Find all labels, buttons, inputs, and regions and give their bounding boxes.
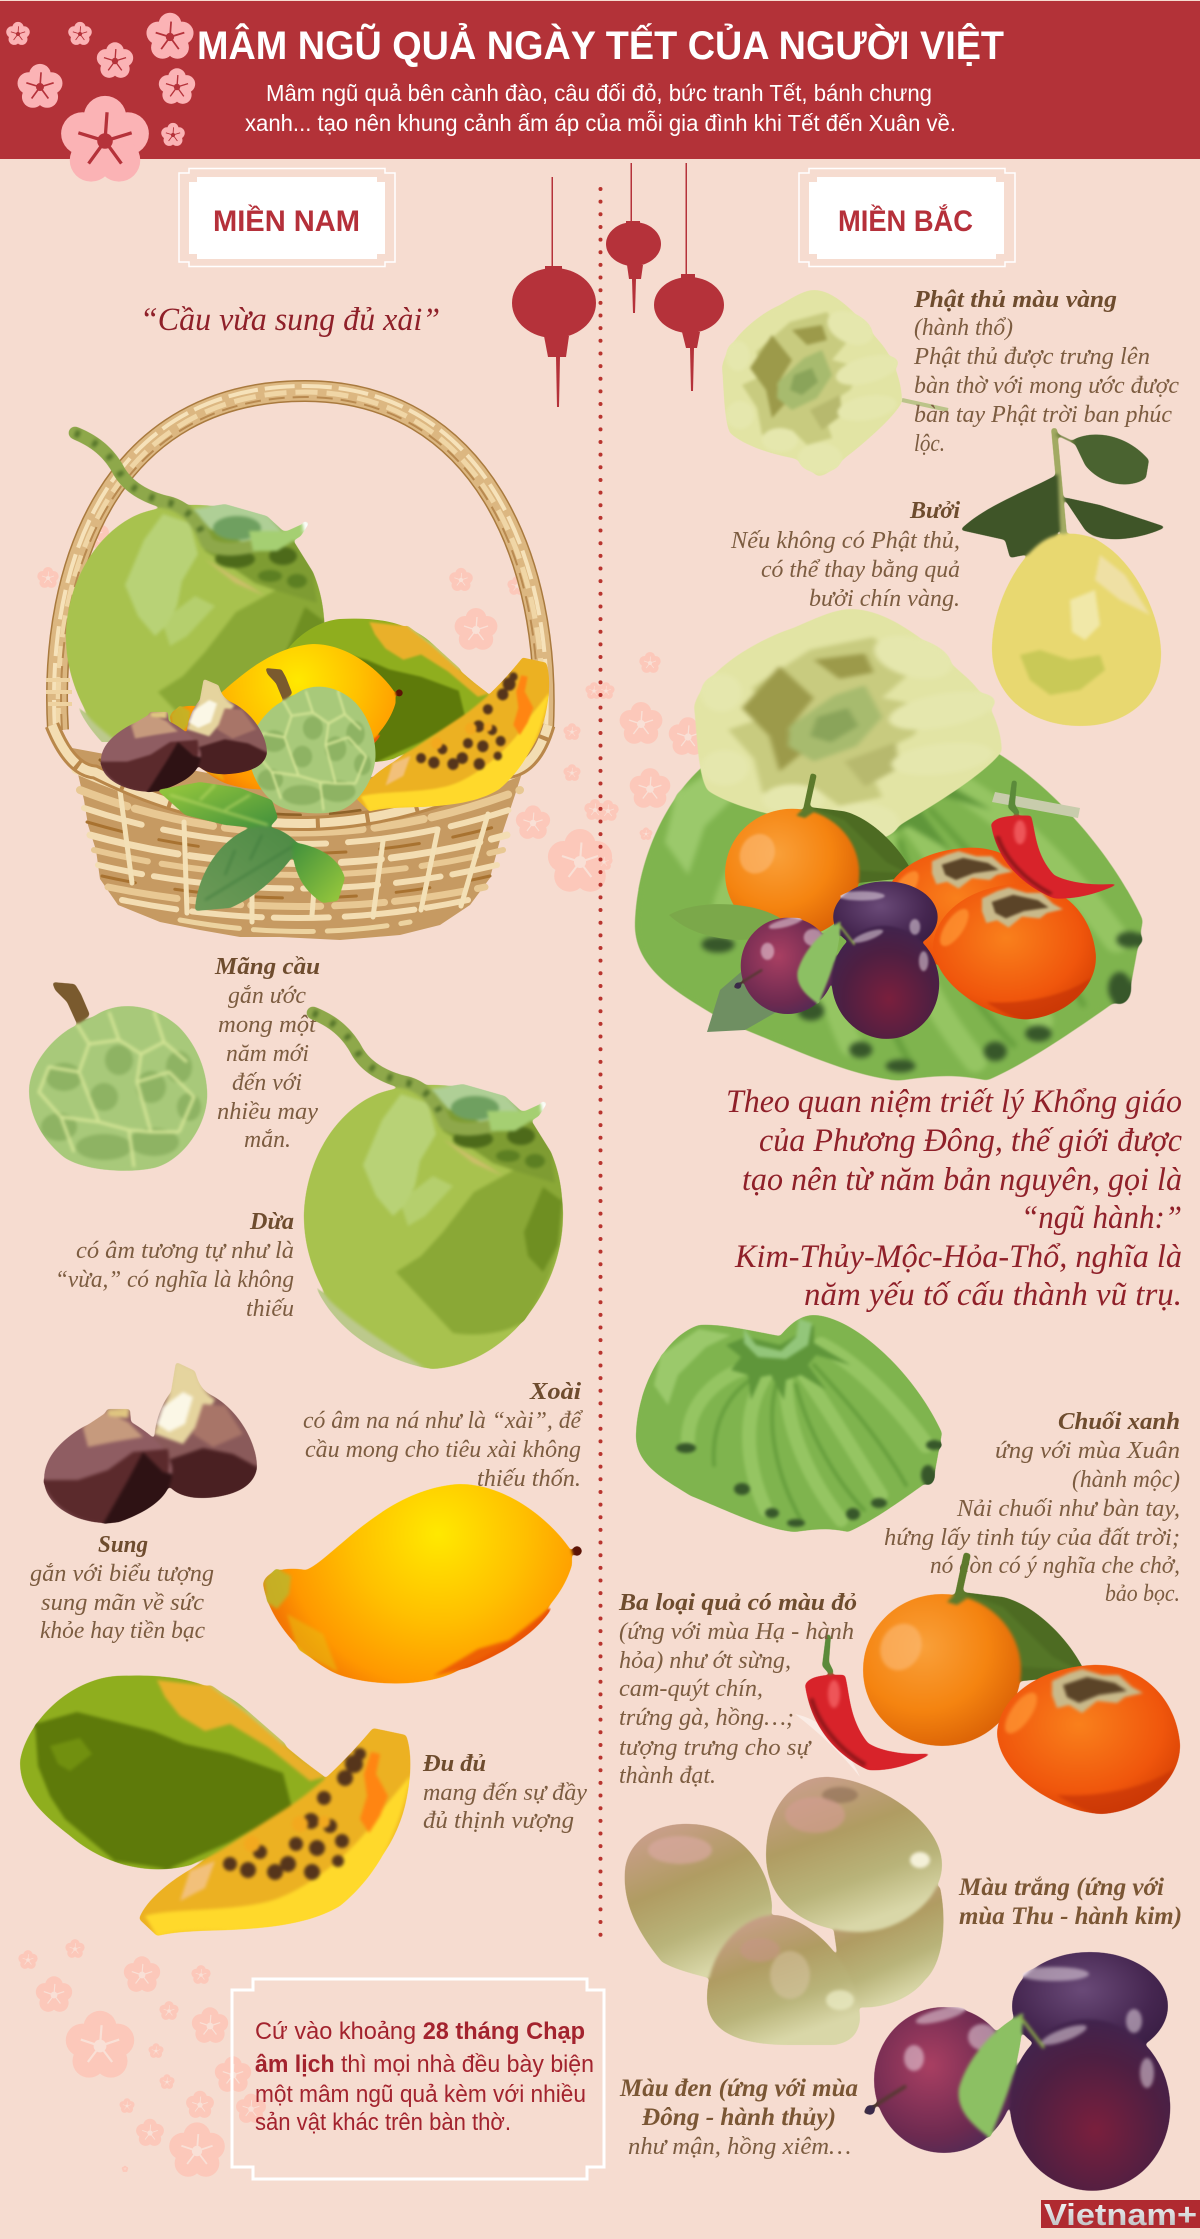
text: Bưởi: Nếu không có Phật thủ, — [730, 528, 960, 554]
text: Phật thủ: lộc. — [914, 431, 945, 457]
text: Nho giáo philosophy: “ngũ hành:” — [1021, 1200, 1182, 1236]
text: Ba loại quả có màu đỏ: hỏa) như ớt sừng, — [619, 1648, 791, 1674]
text: Xoài — [303, 1379, 583, 1492]
plums in tray — [734, 881, 950, 1049]
coconut in basket — [66, 426, 324, 742]
text: Mãng cầu: mong một — [218, 1012, 317, 1038]
text: Chuối xanh: Chuối xanh — [1058, 1409, 1180, 1435]
logo: Vietnam+: Vietnam+ — [1044, 2197, 1197, 2232]
text: Dừa: “vừa,” có nghĩa là không — [55, 1267, 294, 1293]
label: Miền Bắc: MIỀN BẮC — [838, 204, 973, 238]
text: Chuối xanh: nó còn có ý nghĩa che chở, — [930, 1553, 1180, 1579]
fruit: persimmon — [997, 1665, 1180, 1814]
text: Nho giáo philosophy: năm yếu tố cấu thành vũ trụ. — [804, 1277, 1182, 1313]
text: Bưởi — [730, 498, 960, 612]
decorative blossom cluster: centre — [37, 520, 707, 892]
text: Phật thủ — [913, 287, 1179, 457]
chili in tray — [991, 780, 1119, 899]
fruit: Buddha's hand — [722, 290, 948, 476]
basket leaves — [157, 782, 345, 911]
text: Mãng cầu: đến với — [232, 1070, 302, 1096]
persimmons in tray — [883, 848, 1046, 974]
fruit: orange with leaf — [863, 1552, 1084, 1746]
text: Mãng cầu — [214, 954, 320, 1153]
orange in tray — [725, 773, 913, 938]
text: Màu đen: Màu đen (ứng với mùa — [619, 2075, 858, 2102]
Buddha's hand in tray — [694, 609, 1002, 845]
basket body — [72, 748, 530, 940]
text: Nho giáo philosophy: Kim-Thủy-Mộc-Hỏa-Thổ, nghĩa là — [734, 1239, 1182, 1275]
title: MÂM NGŨ QUẢ NGÀY TẾT CỦA NGƯỜI VIỆT — [197, 22, 1004, 68]
text: Nho giáo philosophy — [726, 1084, 1182, 1313]
text: Xoài: cầu mong cho tiêu xài không — [305, 1437, 581, 1463]
basket rim — [46, 680, 548, 824]
composition: five-fruit tray (north) — [635, 609, 1143, 1081]
header subtitle: xanh... tạo nên khung cảnh ấm áp của mỗi gia đình khi Tết đến Xuân về. — [245, 110, 956, 136]
leaves in tray — [669, 904, 780, 940]
text: Chuối xanh: bảo bọc. — [1105, 1581, 1180, 1607]
text: Mãng cầu: năm mới — [226, 1041, 309, 1067]
callout: 28 tháng Chạp: âm lịch thì mọi nhà đều bày biện — [255, 2051, 594, 2078]
text: Ba loại quả có màu đỏ: thành đạt. — [619, 1763, 716, 1789]
text: Màu trắng: Màu trắng (ứng với — [958, 1874, 1164, 1901]
text: Chuối xanh: (hành mộc) — [1072, 1467, 1180, 1493]
text: Dừa — [55, 1209, 294, 1322]
mango in basket — [170, 644, 403, 790]
text: Màu đen: như mận, hồng xiêm… — [628, 2134, 851, 2160]
text: Đu đủ: Đu đủ — [422, 1751, 486, 1777]
fruit: pomelo with leaves — [960, 428, 1166, 726]
text: Ba loại quả có màu đỏ: (ứng với mùa Hạ - hành — [619, 1619, 854, 1645]
fruit: rose apples — [625, 1777, 944, 2045]
text: Dừa: thiếu — [246, 1296, 294, 1322]
header blossoms — [6, 13, 195, 182]
text: Nho giáo philosophy: Theo quan niệm triết lý Khổng giáo — [726, 1084, 1182, 1120]
fruit: mango — [263, 1484, 582, 1683]
basket handle — [54, 386, 547, 730]
text: Chuối xanh: ứng với mùa Xuân — [995, 1438, 1180, 1464]
text: Ba loại quả có màu đỏ: trứng gà, hồng…; — [619, 1705, 794, 1731]
bananas in tray — [635, 729, 1143, 1081]
text: Màu trắng: mùa Thu - hành kim) — [959, 1903, 1182, 1930]
text: Phật thủ: Phật thủ được trưng lên — [913, 344, 1150, 370]
text: Ba loại quả có màu đỏ: cam-quýt chín, — [619, 1676, 763, 1702]
callout: 28 tháng Chạp: Cứ vào khoảng 28 tháng Chạp — [255, 2018, 585, 2045]
label: Miền Nam: MIỀN NAM — [213, 204, 360, 238]
text: Nho giáo philosophy: của Phương Đông, thế giới được — [759, 1123, 1182, 1159]
text: Mãng cầu: gắn ước — [228, 983, 306, 1009]
text: Màu đen — [619, 2075, 858, 2160]
text: Màu đen: Đông - hành thủy) — [641, 2104, 836, 2131]
text: Sung: Sung — [98, 1532, 148, 1558]
quote: Cầu vừa sung đủ xài: “Cầu vừa sung đủ xài” — [140, 302, 440, 338]
basket with five fruits — [46, 386, 549, 940]
sugar apple in basket — [249, 668, 376, 813]
text: Bưởi: có thể thay bằng quả — [761, 557, 960, 583]
fruit: papaya — [20, 1675, 410, 1936]
icon: lanterns — [512, 163, 724, 407]
callout: 28 tháng Chạp: một mâm ngũ quả kèm với nhiều — [255, 2081, 586, 2108]
text: Ba loại quả có màu đỏ: tượng trưng cho sự — [619, 1735, 812, 1761]
papaya in basket — [272, 619, 549, 811]
fruit: figs — [43, 1362, 257, 1524]
text: Chuối xanh: hứng lấy tinh túy của đất trời; — [884, 1525, 1180, 1551]
text: Phật thủ: Phật thủ màu vàng — [913, 287, 1117, 313]
dotted centre divider — [598, 189, 602, 1946]
text: Sung — [30, 1532, 214, 1644]
text: Mãng cầu: nhiều may — [217, 1099, 318, 1125]
text: Nho giáo philosophy: tạo nên từ năm bản nguyên, gọi là — [742, 1162, 1182, 1198]
text: Phật thủ: bàn tay Phật trời ban phúc — [914, 402, 1172, 428]
decorative blossom cluster: bottom left — [18, 1939, 266, 2177]
text: Dừa: Dừa — [249, 1209, 294, 1235]
figs in basket — [100, 679, 267, 792]
label: Miền Nam — [179, 168, 395, 266]
text: Mãng cầu: mắn. — [244, 1127, 291, 1153]
text: Đu đủ: đủ thịnh vượng — [423, 1808, 574, 1834]
text: Màu trắng — [958, 1874, 1182, 1930]
callout: 28 tháng Chạp: sản vật khác trên bàn thờ. — [255, 2109, 511, 2136]
text: Sung: khỏe hay tiền bạc — [40, 1618, 205, 1644]
header band — [0, 1, 1200, 159]
text: Phật thủ: (hành thổ) — [914, 315, 1013, 341]
header subtitle — [245, 80, 956, 136]
text: Bưởi: bưởi chín vàng. — [809, 586, 960, 612]
text: Sung: sung mãn về sức — [41, 1590, 204, 1616]
callout: 28 tháng Chạp — [232, 1979, 604, 2179]
label: Miền Bắc — [799, 168, 1015, 266]
text: Dừa: có âm tương tự như là — [76, 1238, 294, 1264]
text: Ba loại quả có màu đỏ — [618, 1590, 857, 1789]
text: Mãng cầu: Mãng cầu — [214, 954, 320, 980]
header subtitle: Mâm ngũ quả bên cành đào, câu đối đỏ, bức tranh Tết, bánh chưng — [266, 80, 932, 106]
fruit: chili — [795, 1634, 933, 1777]
fruit: sugar apple — [29, 982, 207, 1171]
text: Chuối xanh — [884, 1409, 1180, 1607]
text: Xoài: có âm na ná như là “xài”, để — [303, 1408, 583, 1434]
text: Đu đủ — [422, 1751, 587, 1834]
text: Chuối xanh: Nải chuối như bàn tay, — [956, 1496, 1180, 1522]
text: Đu đủ: mang đến sự đầy — [423, 1780, 587, 1806]
fruit: bananas — [636, 1315, 942, 1532]
text: Xoài: Xoài — [529, 1379, 581, 1405]
text: Xoài: thiếu thốn. — [477, 1466, 581, 1492]
text: Sung: gắn với biểu tượng — [30, 1561, 214, 1587]
text: Bưởi: Bưởi — [909, 498, 960, 524]
fruit: coconut — [304, 1013, 563, 1369]
text: Phật thủ: bàn thờ với mong ước được — [914, 373, 1179, 399]
text: Ba loại quả có màu đỏ: Ba loại quả có màu đỏ — [618, 1590, 857, 1616]
fruit: plums — [864, 1952, 1186, 2206]
